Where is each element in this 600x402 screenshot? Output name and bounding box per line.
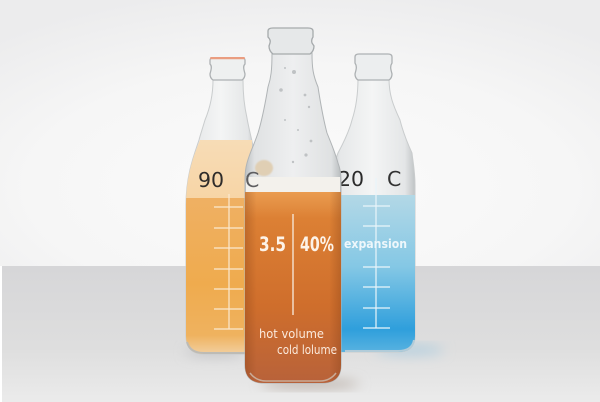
label: C right: C xyxy=(387,167,401,191)
centre bottle: volume ratio xyxy=(245,28,341,383)
label: C left: C xyxy=(245,168,259,192)
right bottle neck xyxy=(355,54,392,80)
condensation droplets xyxy=(279,67,312,163)
centre bottle amber liquid xyxy=(245,192,341,383)
value: 40%: 40% xyxy=(300,233,334,256)
left bottle base xyxy=(187,342,248,353)
value: 3.5: 3.5 xyxy=(259,233,286,256)
centre divider line xyxy=(292,214,294,315)
left bottle pale liquid xyxy=(186,140,252,198)
left bottle: hot 90 C xyxy=(186,57,253,354)
right bottle blue liquid xyxy=(342,195,415,352)
left bottle neck and orange cap ring xyxy=(210,58,245,80)
label: hot volume: hot volume xyxy=(259,327,324,341)
right bottle base xyxy=(345,340,414,351)
label: expansion: expansion xyxy=(344,237,407,251)
centre bottle neck xyxy=(268,28,314,54)
foam xyxy=(246,177,340,193)
right scale xyxy=(363,178,390,328)
bottle shadows xyxy=(185,345,444,388)
label: 20: 20 xyxy=(338,167,364,191)
label: 90: 90 xyxy=(198,168,224,192)
centre bottle base xyxy=(250,373,336,381)
right bottle glass xyxy=(330,78,415,352)
label: cold lolume: cold lolume xyxy=(277,343,337,357)
table surface xyxy=(2,266,600,402)
centre bottle side shading xyxy=(245,192,341,383)
left bottle orange liquid xyxy=(186,198,244,354)
centre bottle glass xyxy=(245,53,341,383)
right bottle: cold 20 C xyxy=(330,54,416,353)
left scale xyxy=(214,194,243,329)
background wall xyxy=(0,0,600,266)
left bottle glass xyxy=(186,80,256,354)
